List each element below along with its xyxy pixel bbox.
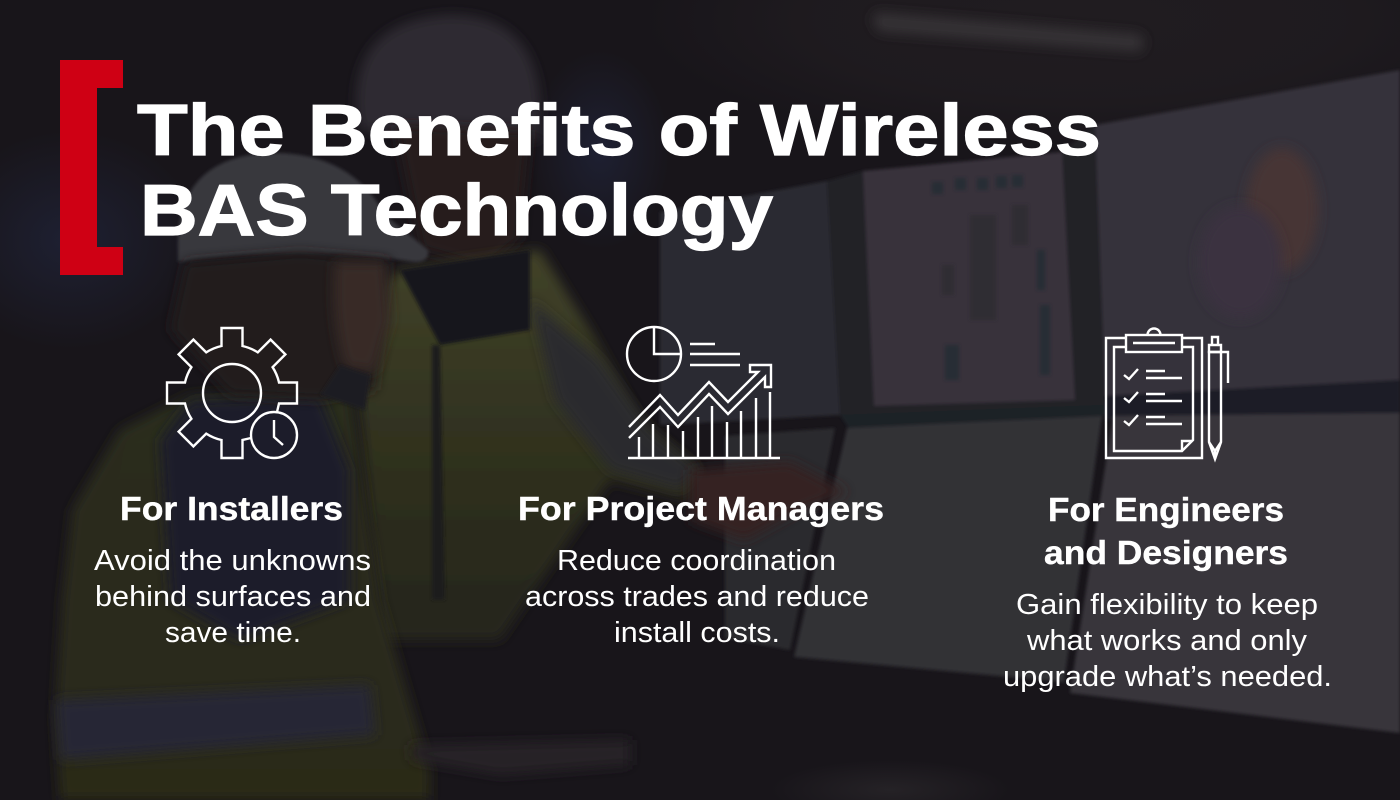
text: engineers and designers benefit bbox=[1003, 589, 1332, 693]
text: project managers benefit: Reduce coordination bbox=[557, 545, 836, 577]
text: installers benefit: behind surfaces and bbox=[95, 581, 371, 613]
text: installers benefit: Avoid the unknowns bbox=[94, 545, 371, 577]
icon: clipboard checklist and pen bbox=[1106, 328, 1228, 459]
title: The Benefits of Wireless bbox=[137, 91, 1101, 171]
text: project managers benefit: across trades and reduce bbox=[525, 581, 869, 613]
red bracket bbox=[60, 60, 123, 275]
title: BAS Technology bbox=[140, 171, 773, 251]
title bbox=[137, 91, 1101, 251]
text: project managers benefit: install costs. bbox=[614, 617, 780, 649]
heading: for project managers: For Project Managers bbox=[518, 490, 884, 527]
panel: for engineers and designers bbox=[1003, 328, 1332, 693]
panel: for installers bbox=[94, 328, 371, 649]
text: installers benefit: save time. bbox=[165, 617, 301, 649]
panel: for project managers bbox=[518, 327, 884, 649]
heading: for engineers and designers bbox=[1044, 491, 1288, 571]
text: installers benefit bbox=[94, 545, 371, 649]
text: engineers and designers benefit: what works and only bbox=[1026, 625, 1308, 657]
text: engineers and designers benefit: upgrade what’s needed. bbox=[1003, 661, 1332, 693]
heading: for engineers and designers: and Designers bbox=[1044, 534, 1288, 571]
heading: for installers: For Installers bbox=[120, 490, 343, 527]
text: project managers benefit bbox=[525, 545, 869, 649]
icon: pie chart and rising graph bbox=[627, 327, 780, 458]
icon: gear with clock bbox=[167, 328, 297, 458]
heading: for engineers and designers: For Engineers bbox=[1048, 491, 1284, 528]
text: engineers and designers benefit: Gain flexibility to keep bbox=[1016, 589, 1318, 621]
